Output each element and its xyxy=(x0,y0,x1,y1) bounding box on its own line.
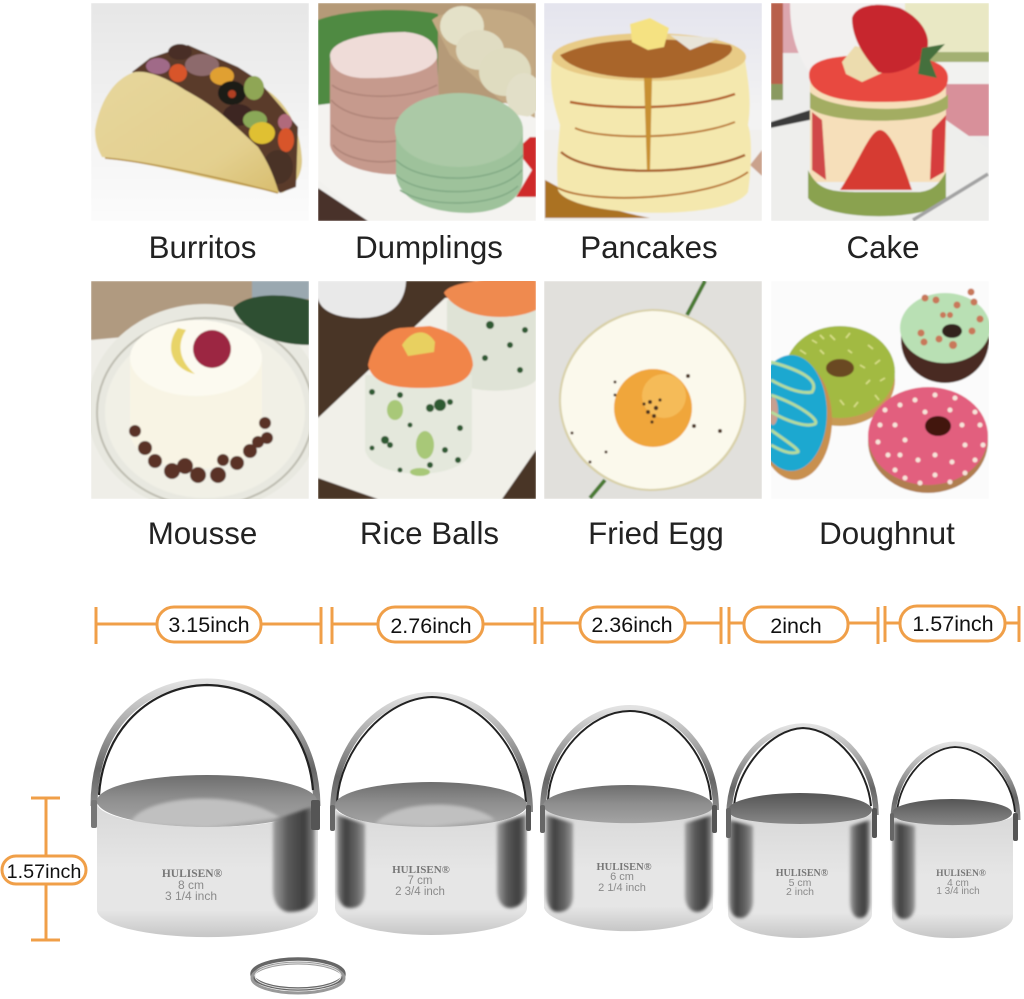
engraved text xyxy=(776,868,829,898)
engraved text xyxy=(392,864,450,898)
label: Burritos: Burritos xyxy=(149,230,256,265)
engraved text: 4 cm xyxy=(947,878,969,889)
dimension: 2.76 inch width: 2.76inch xyxy=(390,614,472,638)
dimension: 3.15 inch width xyxy=(96,607,321,644)
engraved text: 8 cm xyxy=(178,878,204,892)
engraved text: 5 cm xyxy=(789,877,812,889)
dimension: 2.76 inch width xyxy=(332,607,535,644)
dimension: 1.57 inch width: 1.57inch xyxy=(912,612,994,636)
engraved text: 3 1/4 inch xyxy=(165,889,217,903)
label: Rice Balls: Rice Balls xyxy=(360,516,499,551)
photo: doughnut xyxy=(771,288,989,494)
engraved text: 1 3/4 inch xyxy=(936,886,980,897)
cutter: 6 cm xyxy=(540,708,717,931)
photo: pancakes xyxy=(544,3,762,221)
photo: cake xyxy=(771,3,989,221)
dimension: 3.15 inch width: 3.15inch xyxy=(168,613,250,637)
photo: burritos xyxy=(91,3,309,195)
engraved text: 6 cm xyxy=(610,871,634,883)
cutter: 7 cm xyxy=(330,695,531,935)
engraved text: HULISEN® xyxy=(596,862,652,873)
engraved text: 2 1/4 inch xyxy=(598,882,646,894)
dimension: 2 inch width: 2inch xyxy=(770,614,822,638)
photo: rice balls xyxy=(318,279,536,499)
engraved text: HULISEN® xyxy=(776,868,829,879)
cutter: 5 cm xyxy=(726,726,877,938)
icon: split ring xyxy=(252,959,344,993)
engraved text: HULISEN® xyxy=(936,868,986,879)
engraved text: HULISEN® xyxy=(392,864,450,876)
engraved text: HULISEN® xyxy=(162,868,223,880)
label: Pancakes: Pancakes xyxy=(580,230,718,265)
photo: fried egg xyxy=(544,281,762,499)
engraved text xyxy=(596,862,652,894)
dimension: 1.57 inch height xyxy=(2,798,86,940)
label: Cake: Cake xyxy=(846,230,920,265)
photo: mousse xyxy=(91,281,309,499)
dimension: 2 inch width xyxy=(729,607,878,644)
engraved text: 7 cm xyxy=(408,875,432,887)
dimension: 2.36 inch width xyxy=(542,607,721,644)
cutter: 8 cm xyxy=(91,682,320,937)
engraved text xyxy=(162,868,223,903)
dimension: 1.57 inch width xyxy=(885,606,1019,642)
engraved text: 2 inch xyxy=(786,886,814,898)
photo: dumplings xyxy=(318,3,542,221)
engraved text xyxy=(936,868,986,897)
label: Doughnut: Doughnut xyxy=(819,516,955,551)
dimension: 1.57 inch height: 1.57inch xyxy=(7,861,81,883)
cutter: 4 cm xyxy=(890,744,1018,938)
engraved text: 2 3/4 inch xyxy=(395,886,445,898)
label: Dumplings: Dumplings xyxy=(355,230,503,265)
dimension: 2.36 inch width: 2.36inch xyxy=(591,613,673,637)
label: Mousse: Mousse xyxy=(148,516,257,551)
label: Fried Egg: Fried Egg xyxy=(588,516,724,551)
